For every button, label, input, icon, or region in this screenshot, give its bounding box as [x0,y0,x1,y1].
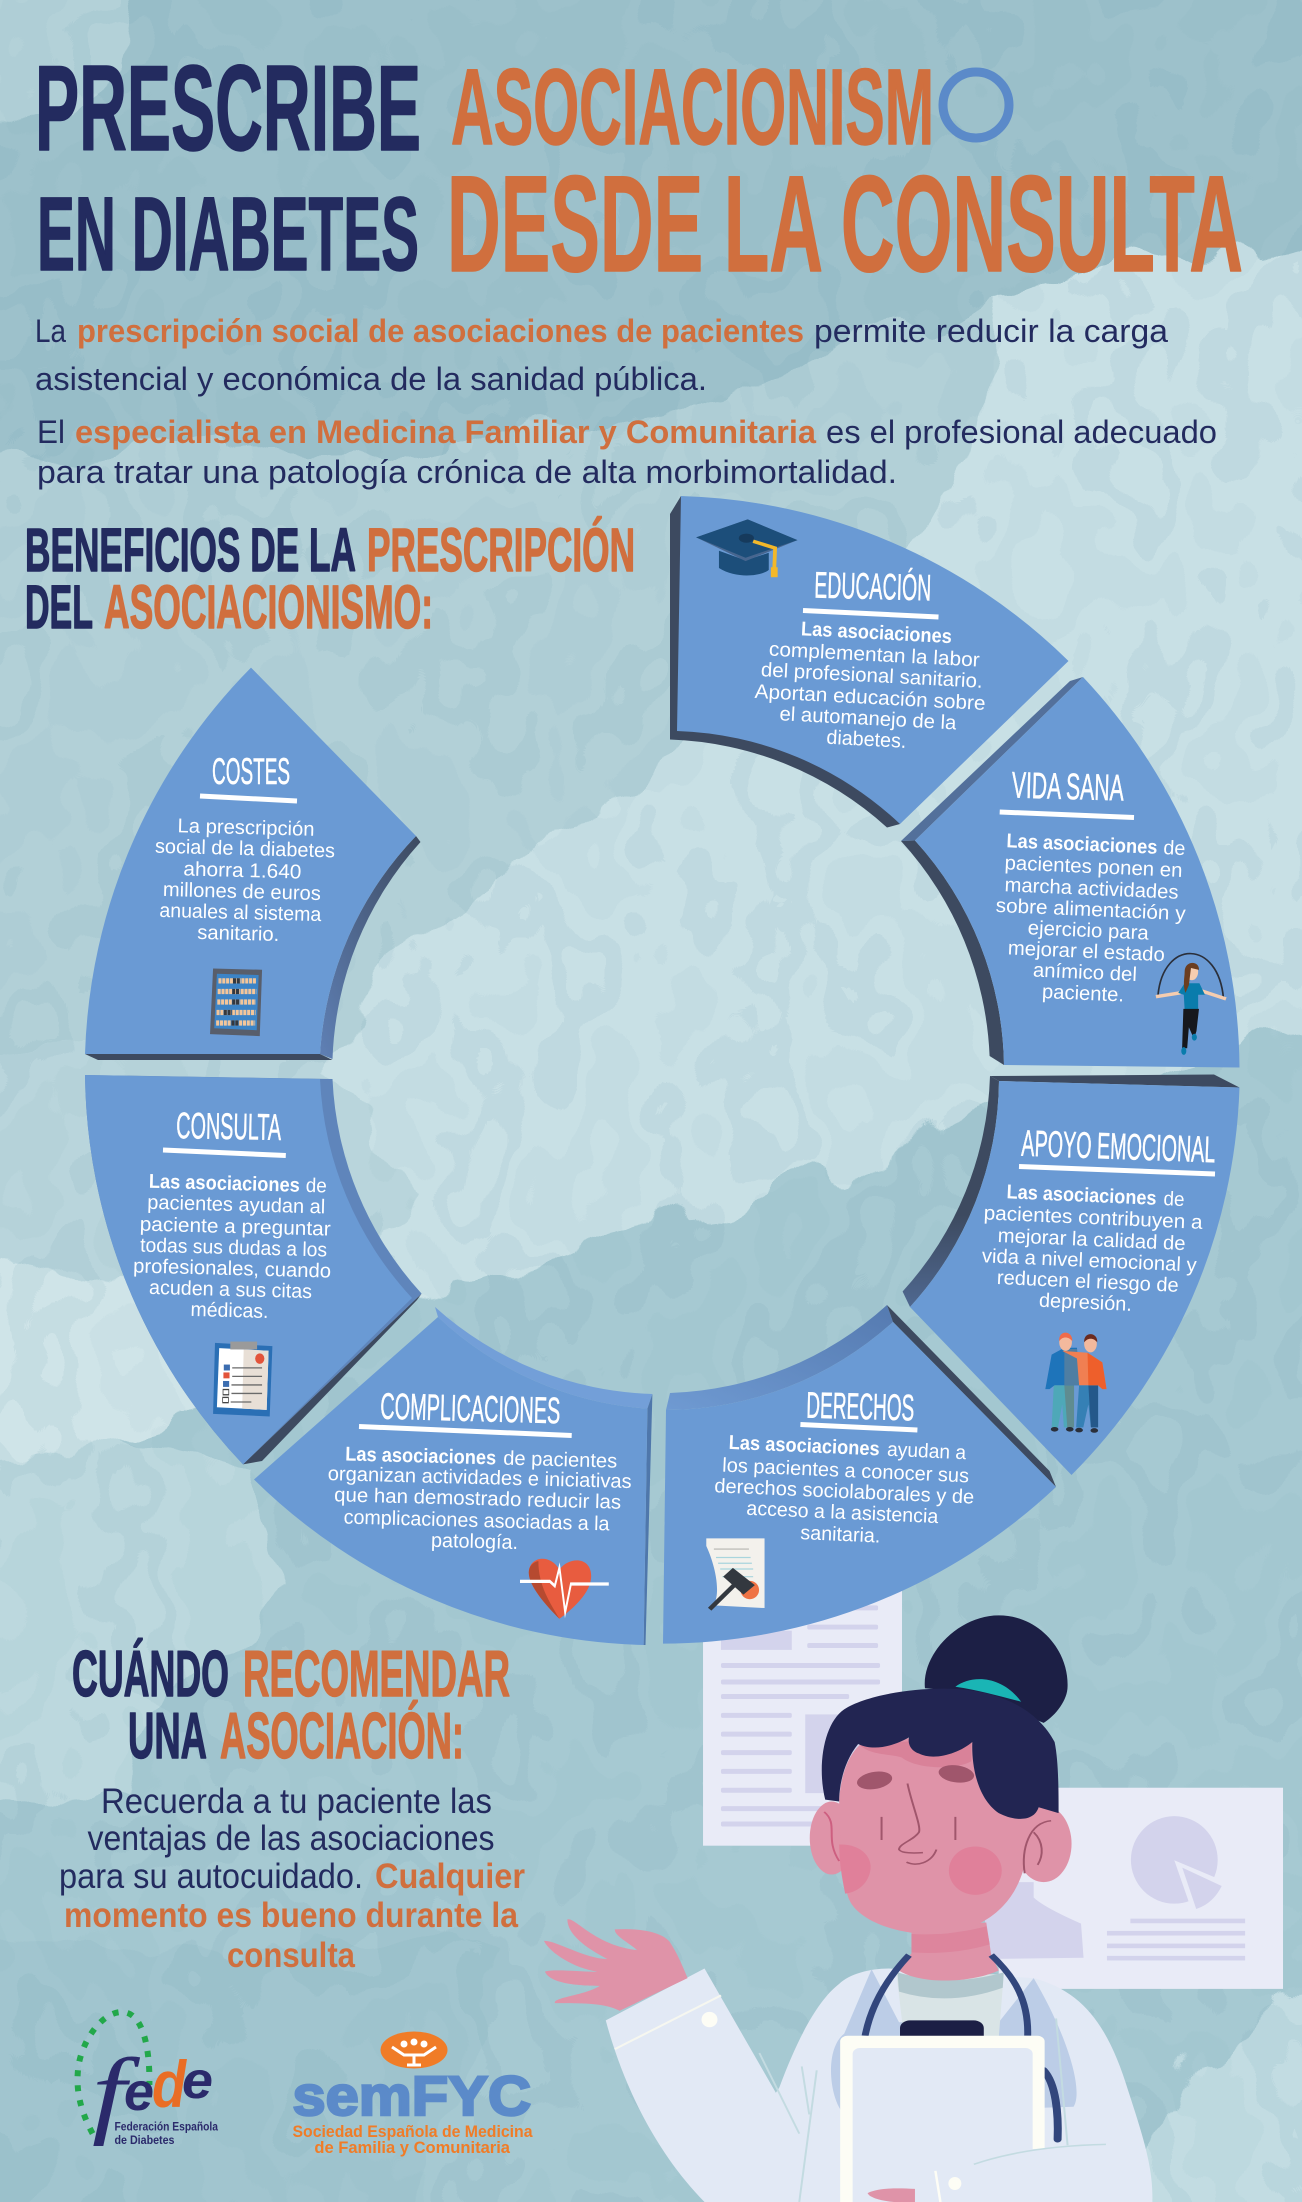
text: consulta: acuden a sus citas [149,1277,312,1303]
text: apoyo emocional: depresión. [1038,1290,1132,1316]
recommendation text: para su autocuidado. [59,1857,363,1896]
segment: complicaciones [254,1307,652,1645]
text: derechos: derechos sociolaborales y de [714,1475,975,1509]
text: educación: diabetes. [826,727,907,753]
text: costes [153,815,336,947]
intro text: El [37,414,65,450]
heading: derechos: DERECHOS [806,1385,915,1428]
icon: heart with pulse [520,1559,609,1619]
text: consulta: de [306,1175,327,1197]
logo: fede: d [152,2047,187,2121]
segment: educación [670,496,1068,828]
text: derechos: sanitaria. [800,1522,881,1548]
heading: consulta: CONSULTA [176,1105,282,1148]
logo: semFYC: de Familia y Comunitaria [314,2138,511,2157]
when to recommend heading: UNA [128,1699,207,1772]
text: educación: el automanejo de la [779,703,958,734]
text: vida sana: de [1163,837,1186,860]
title: EN DIABETES [37,176,419,293]
text: educación: Aportan educación sobre [754,681,986,715]
text: complicaciones: que han demostrado reducir las [334,1484,621,1514]
intro text: para tratar una patología crónica de alta morbimortalidad. [37,454,897,490]
benefits heading [25,516,635,641]
text: consulta: paciente a preguntar [139,1214,331,1241]
background chart sheet [984,1788,1283,1989]
text: educación [752,616,989,757]
recommendation text: Cualquier [375,1857,525,1896]
logo: semFYC: semFYC [292,2064,531,2127]
benefits heading: PRESCRIPCIÓN [367,516,635,584]
recommendation text [59,1782,525,1975]
text: complicaciones [326,1443,632,1557]
text: educación: Las asociaciones [801,618,952,648]
recommendation text: momento es bueno durante la [64,1896,518,1935]
text: apoyo emocional: mejorar la calidad de [997,1225,1186,1255]
text: apoyo emocional: pacientes contribuyen a [983,1202,1204,1234]
text: vida sana: marcha actividades [1004,874,1179,904]
text: costes: La prescripción [177,815,315,841]
text: derechos [712,1431,977,1552]
logo: fede: de Diabetes [114,2133,175,2147]
intro text: prescripción social de asociaciones de pacientes [77,313,804,349]
text: complicaciones: Las asociaciones [345,1444,497,1469]
text: vida sana: mejorar el estado [1007,937,1165,966]
text: vida sana [992,830,1189,1009]
text: costes: ahorra 1.640 [183,858,302,884]
logo: fede: e [182,2052,213,2110]
text: complicaciones: patología. [431,1530,518,1554]
logo: semFYC: Sociedad Española de Medicina [292,2122,533,2141]
heading: vida sana: VIDA SANA [1011,765,1125,808]
text: vida sana: ejercicio para [1027,917,1150,945]
when to recommend heading: ASOCIACIÓN: [220,1699,464,1772]
text: apoyo emocional [980,1180,1205,1319]
icon: abacus [210,968,262,1036]
logo: fede [78,2012,218,2147]
icon: clipboard [213,1342,272,1416]
when to recommend heading: CUÁNDO [72,1637,229,1710]
text: apoyo emocional: reducen el riesgo de [996,1267,1179,1297]
intro text: asistencial y económica de la sanidad pública. [35,361,707,397]
heading: complicaciones: COMPLICACIONES [380,1386,561,1431]
text: educación: complementan la labor [768,639,981,672]
text: apoyo emocional: de [1163,1188,1185,1211]
text: apoyo emocional: vida a nivel emocional y [981,1245,1197,1277]
text: educación: del profesional sanitario. [760,659,983,693]
when to recommend heading: RECOMENDAR [243,1637,510,1710]
text: derechos: acceso a la asistencia [746,1498,940,1528]
benefits heading: BENEFICIOS DE LA [25,516,356,584]
intro text [35,313,1217,490]
logo: fede: e [124,2062,154,2122]
text: derechos: Las asociaciones [728,1432,880,1460]
recommendation text: ventajas de las asociaciones [88,1819,494,1858]
text: complicaciones: complicaciones asociadas a la [343,1506,611,1535]
intro text: La [35,313,66,349]
heading: educación: EDUCACIÓN [814,564,932,609]
logo: semFYC [292,2032,533,2157]
recommendation text: Recuerda a tu paciente las [101,1782,492,1821]
text: costes: millones de euros [163,879,321,905]
segment: consulta [85,1075,422,1464]
benefits heading: DEL [25,573,93,641]
text: vida sana: Las asociaciones [1006,830,1158,859]
text: costes: social de la diabetes [155,836,335,862]
title [35,40,1243,301]
text: vida sana: anímico del [1032,960,1137,986]
icon: scroll and gavel [706,1538,765,1609]
text: consulta: médicas. [190,1299,269,1323]
title: PRESCRIBE [35,40,421,176]
background document [703,1585,902,1846]
logo: fede: f [92,2039,141,2147]
benefits heading: ASOCIACIONISMO: [104,573,433,641]
text: vida sana: paciente. [1042,981,1124,1007]
recommendation text: consulta [227,1936,355,1975]
heading: costes: COSTES [212,751,290,792]
text: consulta: todas sus dudas a los [140,1235,327,1261]
icon: graduation cap [696,519,797,577]
segment: vida sana [901,677,1240,1068]
text: complicaciones: organizan actividades e iniciativas [327,1463,632,1493]
text: consulta [132,1170,334,1325]
logo: fede: Federación Española [114,2120,218,2134]
text: costes: anuales al sistema [159,900,322,926]
segment: apoyo emocional [903,1074,1240,1475]
text: apoyo emocional: Las asociaciones [1006,1181,1157,1210]
text: derechos: ayudan a [887,1439,967,1464]
illustration: doctor [544,1615,1152,2202]
text: consulta: profesionales, cuando [133,1255,331,1283]
intro text: es el profesional adecuado [826,414,1217,450]
icon: jump rope girl [1156,954,1226,1055]
text: consulta: pacientes ayudan al [147,1192,326,1218]
text: vida sana: sobre alimentación y [995,895,1186,925]
when to recommend heading [72,1637,510,1772]
text: consulta: Las asociaciones [149,1171,300,1197]
text: vida sana: pacientes ponen en [1004,852,1183,882]
segment: costes [85,668,420,1060]
text: costes: sanitario. [197,922,280,946]
intro text: permite reducir la carga [814,313,1168,349]
icon: two people [1045,1333,1107,1433]
segment: derechos [663,1305,1056,1644]
intro text: especialista en Medicina Familiar y Comunitaria [75,414,816,450]
text: derechos: los pacientes a conocer sus [722,1455,970,1487]
text: complicaciones: de pacientes [503,1448,617,1473]
